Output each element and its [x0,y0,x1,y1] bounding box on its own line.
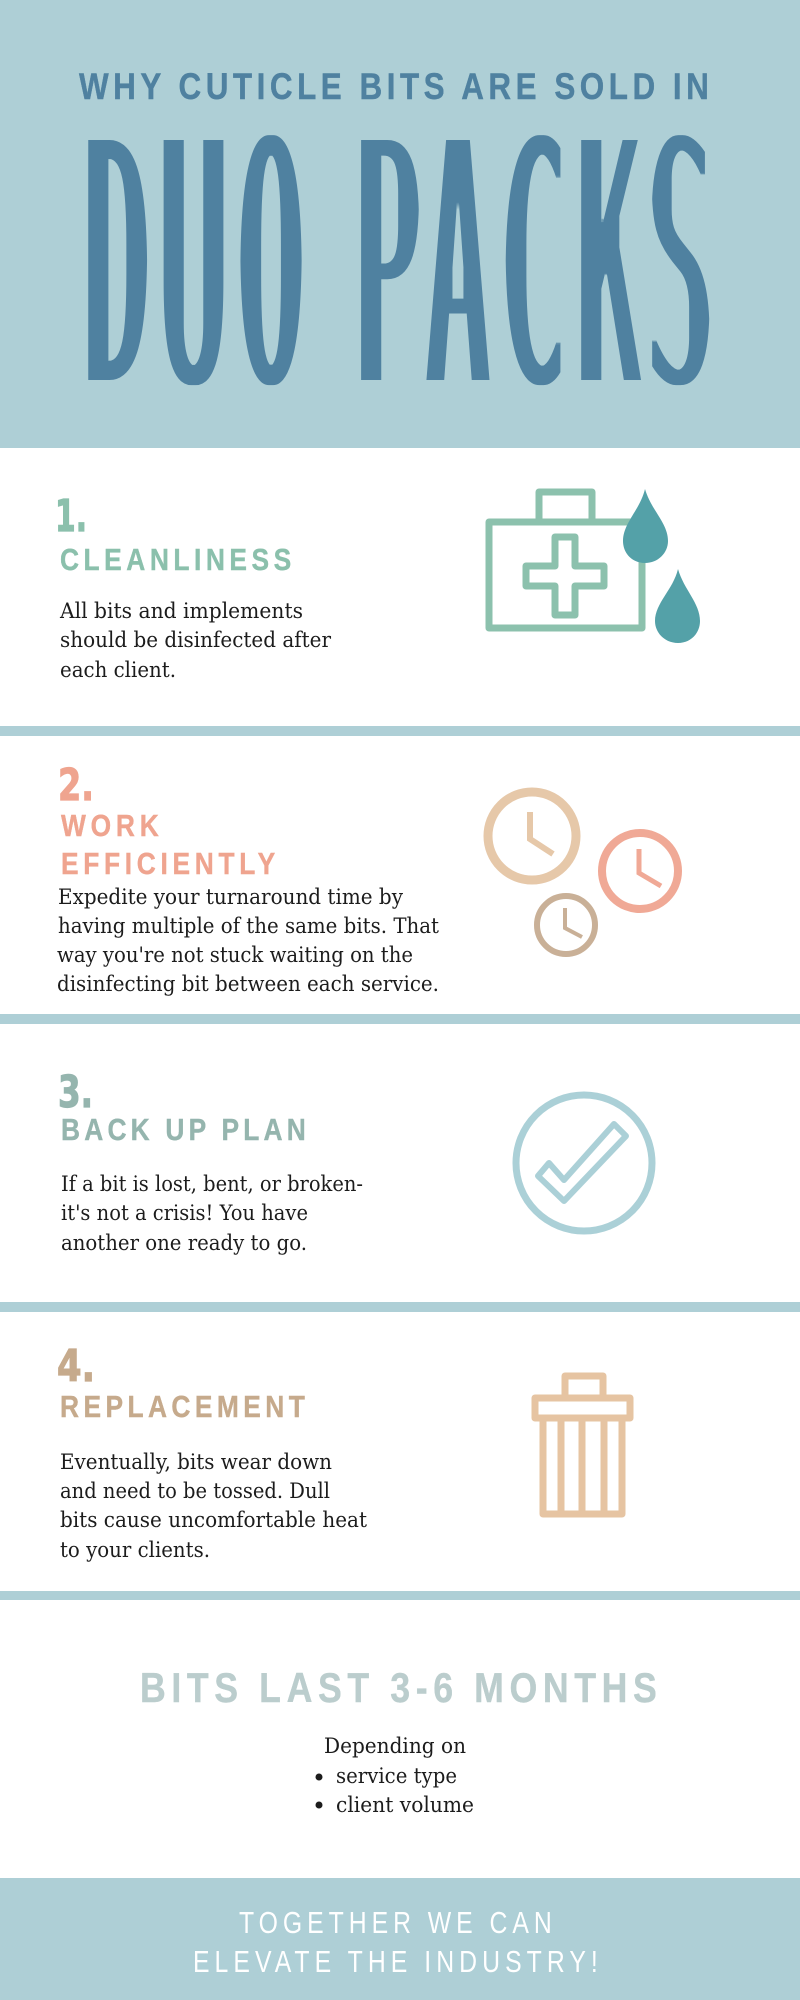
body text [57,885,440,996]
heading: replacement: REPLACEMENT [60,1390,305,1425]
panel: 2 work efficiently [57,760,678,996]
body text: All bits and implements [59,599,303,623]
list: service type and client volume: service type [336,1764,457,1788]
number 3: 3. [58,1067,93,1118]
body text: it's not a crisis! You have [61,1201,308,1225]
body text: to your clients. [60,1538,210,1562]
body text: should be disinfected after [60,628,332,652]
panel: 1 cleanliness [55,489,700,682]
subtitle: WHY CUTICLE BITS ARE SOLD IN [79,67,709,108]
panel: bits last 3-6 months [140,1665,657,1817]
body text [60,1450,368,1562]
footer message: ELEVATE THE INDUSTRY! [193,1944,598,1979]
body text: way you're not stuck waiting on the [57,943,413,967]
panel: footer [0,1878,800,2000]
body text [61,1172,363,1255]
icon: check in circle [516,1095,652,1231]
footer message [193,1905,598,1979]
body text: having multiple of the same bits. That [58,914,440,938]
body text: bits cause uncomfortable heat [60,1508,368,1532]
number 2: 2. [58,760,94,811]
body text: each client. [60,658,176,682]
title: DUO PACKS [83,53,714,482]
panel: 3 back up plan [58,1067,652,1255]
number 1: 1. [55,491,87,542]
heading: back up plan: BACK UP PLAN [61,1113,306,1148]
icon: trash can [535,1376,630,1514]
heading: work efficiently: EFFICIENTLY [61,847,275,882]
body text: Eventually, bits wear down [60,1450,332,1474]
icon: medical kit with drops [489,489,700,643]
body text: If a bit is lost, bent, or broken- [61,1172,363,1196]
panel: 4 replacement [57,1341,630,1562]
body text: Expedite your turnaround time by [58,885,403,909]
body text [59,599,332,682]
heading: months: BITS LAST 3-6 MONTHS [140,1665,657,1712]
icon: clocks [488,792,678,954]
heading: work efficiently [61,809,275,882]
text: depending on: Depending on [324,1734,466,1758]
body text: disinfecting bit between each service. [57,972,439,996]
list: service type and client volume [316,1764,474,1817]
list: service type and client volume: client volume [336,1793,474,1817]
footer message: TOGETHER WE CAN [239,1905,552,1940]
body text: and need to be tossed. Dull [60,1479,330,1503]
heading: work efficiently: WORK [61,809,159,844]
heading: cleanliness: CLEANLINESS [60,543,291,578]
panel: header [0,0,800,482]
number 4: 4. [57,1341,95,1392]
body text: another one ready to go. [61,1231,307,1255]
